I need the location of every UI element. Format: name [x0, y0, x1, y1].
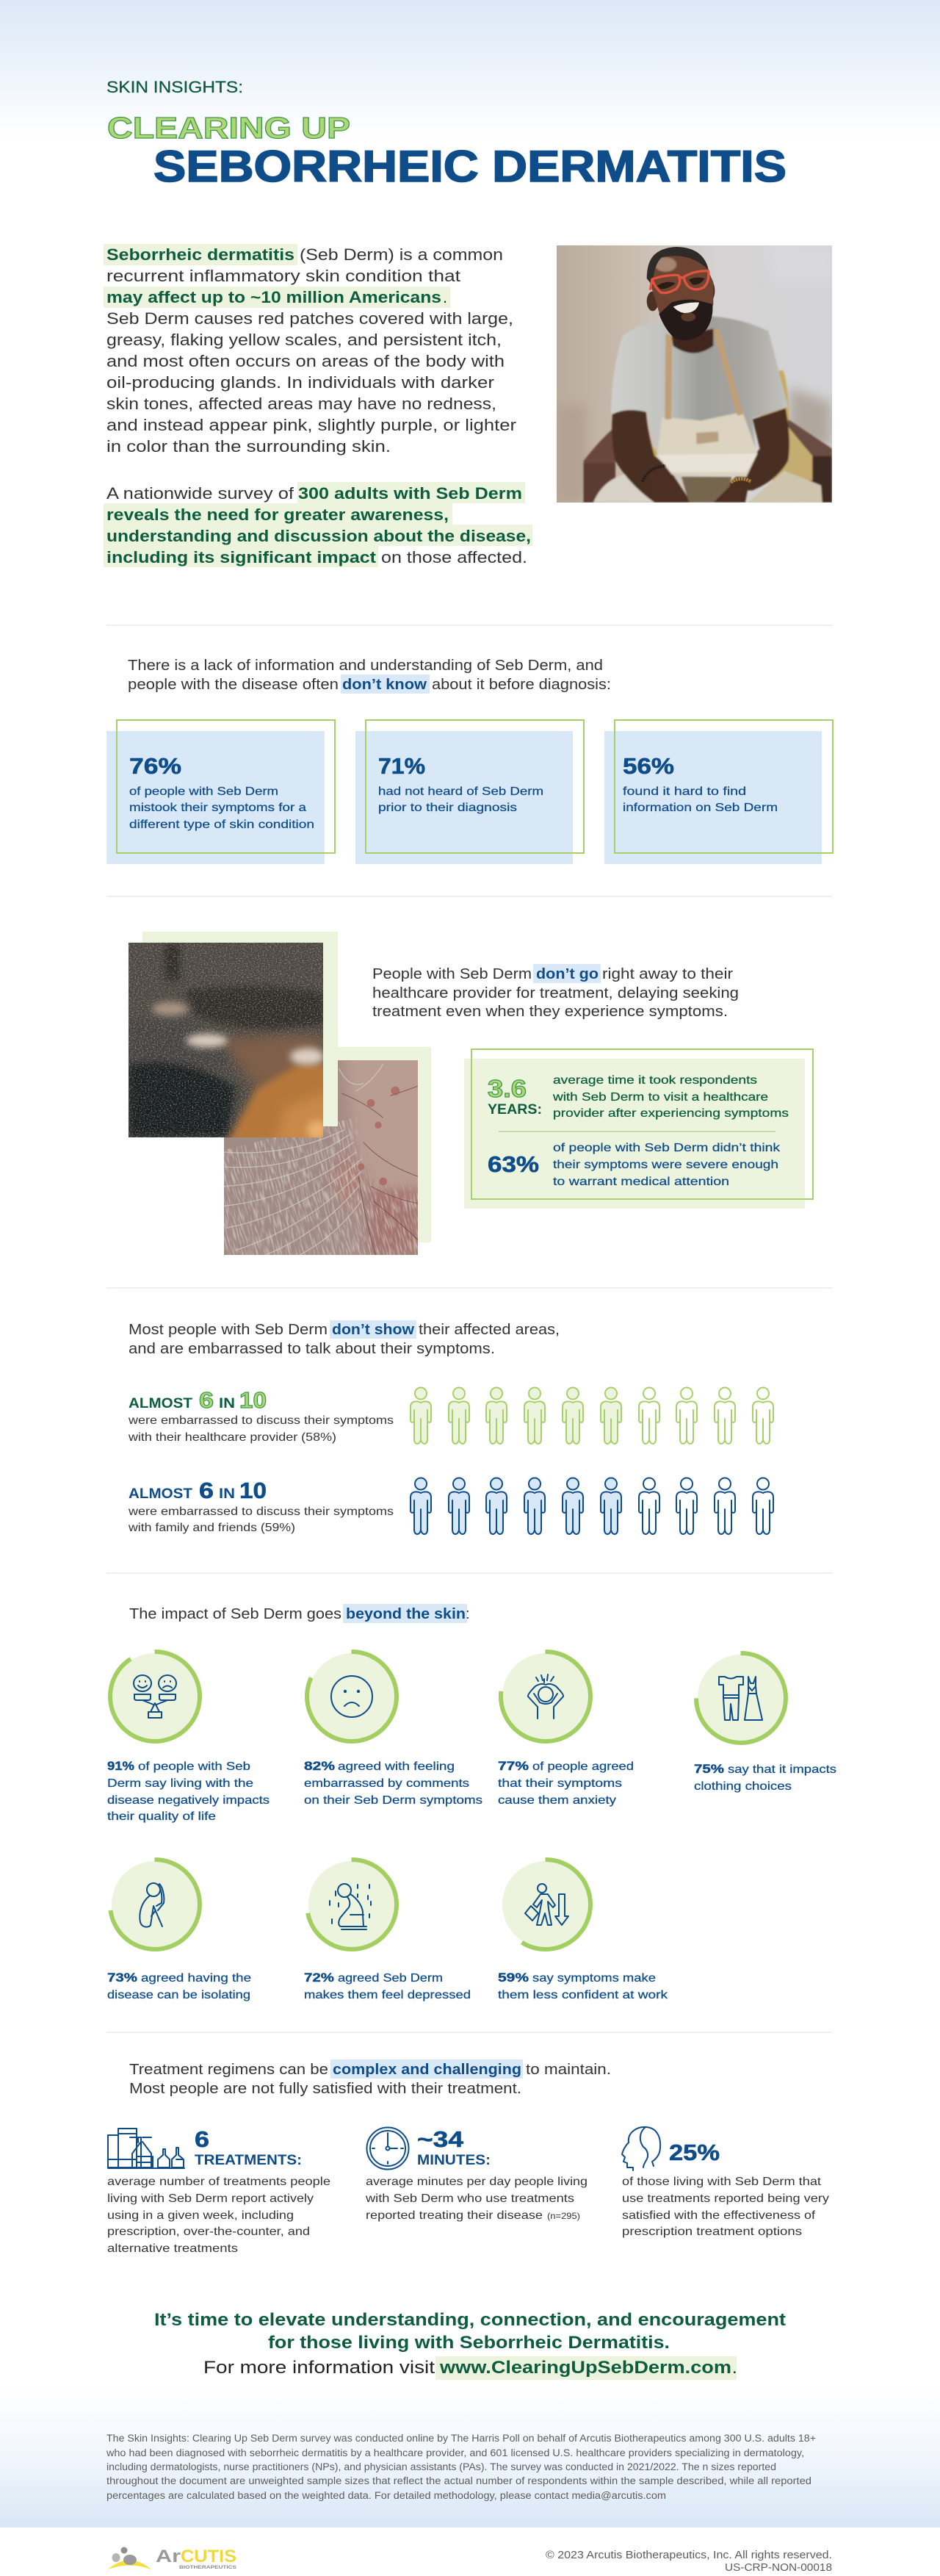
- call to action: [154, 2310, 786, 2380]
- intro text block: and most often occurs on areas of the body with: [106, 352, 505, 370]
- section: don't go: [129, 932, 814, 1255]
- photo backing panel: upper: [142, 932, 338, 1126]
- intro text: don't know: about it before diagnosis:: [432, 677, 611, 693]
- donut: 91% with scale of emotions icon: [110, 1652, 200, 1741]
- intro text: beyond the skin: beyond the skin: [346, 1606, 466, 1622]
- stat: 73% isolating: agreed having the: [141, 1972, 251, 1985]
- card: 76%: mistook their symptoms for a: [129, 802, 306, 814]
- stat: almost 6 in 10 healthcare provider: with their healthcare provider (58%): [128, 1431, 336, 1444]
- stat: 91% quality of life: disease negatively impacts: [107, 1794, 270, 1807]
- donut: 73% with curled up person icon: [110, 1860, 200, 1949]
- stat: almost 6 in 10 family and friends: with family and friends (59%): [128, 1522, 295, 1534]
- intro text block: (Seb Derm) is a common: [300, 245, 503, 264]
- photo: gray hair scalp with red flaky patches: [224, 1060, 418, 1255]
- stat: 25%: of those living with Seb Derm that: [622, 2176, 822, 2188]
- call to action: .: [732, 2358, 737, 2378]
- card: 76%: [106, 720, 335, 864]
- stat: 91% quality of life: [107, 1652, 270, 1823]
- copyright: © 2023 Arcutis Biotherapeutics, Inc. All rights reserved.: [546, 2549, 832, 2561]
- stat: 63%: their symptoms were severe enough: [553, 1159, 778, 1171]
- call to action: www.ClearingUpSebDerm.com: [439, 2358, 731, 2378]
- stat: 59% confidence at work: 59%: [498, 1971, 529, 1985]
- intro text block: and instead appear pink, slightly purple, or lighter: [106, 416, 516, 434]
- intro text block: A nationwide survey of: [106, 484, 294, 503]
- intro text: don't go: healthcare provider for treatment, delaying seeking: [372, 985, 739, 1001]
- stat: 59% confidence at work: [498, 1860, 668, 2001]
- stat: almost 6 in 10 family and friends: were embarrassed to discuss their symptoms: [128, 1505, 394, 1518]
- stat: 72% depressed: 72%: [304, 1971, 334, 1985]
- divider: [106, 2032, 832, 2033]
- call to action: It’s time to elevate understanding, connection, and encouragement: [154, 2310, 786, 2330]
- icon: head profile with hair: [622, 2127, 660, 2170]
- card: 71%: [355, 720, 584, 864]
- stat: ~34 minutes: average minutes per day people living: [366, 2176, 588, 2188]
- intro text: complex and challenging: [129, 2059, 611, 2097]
- divider: [106, 896, 832, 897]
- donut: 59% with walking person and down arrow icon: [501, 1860, 590, 1949]
- divider: [106, 1572, 832, 1574]
- stat: 6 treatments: prescription, over-the-counter, and: [107, 2226, 310, 2238]
- intro text: complex and challenging: to maintain.: [526, 2062, 611, 2078]
- section: don't show: [128, 1320, 773, 1534]
- stat: almost 6 in 10 healthcare provider: ALMOST: [129, 1396, 192, 1411]
- intro text block: 300 adults with Seb Derm: [298, 484, 522, 503]
- stat: 63%: [488, 1142, 781, 1188]
- intro text block: .: [443, 288, 447, 306]
- eyebrow: skin insights: SKIN INSIGHTS:: [106, 78, 243, 96]
- stat: 77% anxiety: that their symptoms: [498, 1777, 622, 1790]
- stat: 72% depressed: [304, 1860, 471, 2001]
- footnote: The Skin Insights: Clearing Up Seb Derm survey was conducted online by The Harris Poll on behalf of Arcutis Biotherapeutics among 300 U.S. adults 18+: [106, 2433, 816, 2444]
- stat: 91% quality of life: 91%: [107, 1759, 134, 1773]
- section: don't know: [106, 658, 833, 864]
- copyright: [546, 2549, 832, 2574]
- stat: 63%: of people with Seb Derm didn’t think: [553, 1142, 781, 1154]
- intro text block: skin tones, affected areas may have no redness,: [106, 395, 496, 413]
- photo backing panel: lower: [238, 1047, 431, 1242]
- stat: 25%: [622, 2127, 829, 2238]
- card: 56%: [604, 720, 833, 864]
- stat: 6 treatments: [107, 2126, 330, 2255]
- stat: 73% isolating: [107, 1860, 251, 2001]
- stat: 63%: 63%: [488, 1151, 539, 1177]
- intro text block: on those affected.: [381, 548, 527, 566]
- intro text: don't know: don’t know: [342, 677, 427, 693]
- title line: clearing up: CLEARING UP: [107, 111, 350, 145]
- donut: 77% with hands on head icon: [501, 1652, 590, 1741]
- stat: 6 treatments: average number of treatments people: [107, 2176, 330, 2188]
- intro text: complex and challenging: Most people are not fully satisfied with their treatment.: [129, 2081, 521, 2097]
- stat: ~34 minutes: (n=295): [547, 2211, 580, 2221]
- stat: ~34 minutes: [365, 2126, 588, 2222]
- footnote: percentages are calculated based on the weighted data. For detailed methodology, please contact media@arcutis.com: [106, 2490, 666, 2501]
- divider: [106, 625, 832, 626]
- stat: 75% clothing: clothing choices: [694, 1780, 792, 1793]
- card: 71%: 71%: [378, 753, 425, 779]
- section: complex and challenging: [107, 2059, 829, 2255]
- stat: 6 treatments: TREATMENTS:: [195, 2153, 302, 2168]
- intro text: don't show: their affected areas,: [419, 1322, 560, 1338]
- stat: 77% anxiety: of people agreed: [532, 1760, 634, 1773]
- intro text: don't show: Most people with Seb Derm: [129, 1322, 328, 1338]
- call to action: For more information visit: [203, 2358, 435, 2378]
- stat: 91% quality of life: their quality of life: [107, 1810, 216, 1823]
- logo: Arcutis Biotherapeutics: BIOTHERAPEUTICS: [179, 2566, 236, 2570]
- stat: 3.6 years: [488, 1074, 789, 1120]
- intro text: don't go: don’t go: [536, 966, 599, 982]
- intro text: don't go: right away to their: [602, 966, 733, 982]
- card: 76%: of people with Seb Derm: [129, 785, 278, 798]
- stat: 73% isolating: 73%: [107, 1971, 137, 1985]
- intro text: don't show: [129, 1320, 560, 1357]
- stat: almost 6 in 10 healthcare provider: [128, 1387, 394, 1444]
- pictogram: 6 of 10 people green: [411, 1387, 773, 1444]
- intro text: don't know: [128, 658, 611, 694]
- divider: [106, 1287, 832, 1289]
- stat: 3.6 years: 3.6: [488, 1075, 527, 1102]
- intro text: don't go: [372, 964, 739, 1020]
- intro text: don't know: There is a lack of information and understanding of Seb Derm, and: [128, 658, 603, 674]
- stat: almost 6 in 10 family and friends: ALMOST: [129, 1486, 192, 1502]
- intro text block: greasy, flaking yellow scales, and persistent itch,: [106, 331, 502, 349]
- logo: Arcutis Biotherapeutics: CUTIS: [181, 2547, 236, 2566]
- intro text block: Seb Derm causes red patches covered with large,: [106, 309, 513, 328]
- callout panel: delay statistics: [464, 1049, 813, 1209]
- intro text: complex and challenging: complex and challenging: [333, 2062, 521, 2078]
- stat: 3.6 years: YEARS:: [488, 1102, 542, 1118]
- stat: 59% confidence at work: say symptoms make: [532, 1972, 656, 1985]
- stat: 25%: satisfied with the effectiveness of: [622, 2209, 816, 2222]
- stat: 6 treatments: 6: [195, 2126, 209, 2152]
- copyright: US-CRP-NON-00018: [725, 2561, 832, 2574]
- icon: clock: [367, 2128, 408, 2169]
- stat: almost 6 in 10 family and friends: 10: [239, 1478, 267, 1503]
- stat: almost 6 in 10 healthcare provider: IN: [219, 1396, 235, 1411]
- stat: 82% embarrassed: [304, 1652, 482, 1807]
- stat: 25%: 25%: [669, 2140, 720, 2165]
- card: 56%: information on Seb Derm: [623, 802, 778, 814]
- stat: 6 treatments: alternative treatments: [107, 2242, 238, 2255]
- intro text: don't go: People with Seb Derm: [372, 966, 532, 982]
- stat: almost 6 in 10 healthcare provider: 6: [199, 1387, 214, 1413]
- stat: 77% anxiety: 77%: [498, 1759, 529, 1773]
- card: 76%: different type of skin condition: [129, 819, 314, 831]
- stat: 77% anxiety: [498, 1652, 634, 1807]
- stat: 82% embarrassed: 82%: [304, 1759, 335, 1773]
- stat: almost 6 in 10 family and friends: IN: [219, 1486, 235, 1502]
- stat: 75% clothing: say that it impacts: [728, 1763, 836, 1776]
- intro text: don't show: don’t show: [332, 1322, 414, 1338]
- stat: 91% quality of life: Derm say living with the: [107, 1777, 253, 1790]
- call to action: for those living with Seborrheic Dermatitis.: [268, 2333, 670, 2353]
- intro text block: recurrent inflammatory skin condition that: [106, 267, 460, 285]
- stat: almost 6 in 10 healthcare provider: 10: [239, 1387, 267, 1413]
- stat: 3.6 years: provider after experiencing symptoms: [553, 1107, 789, 1120]
- footnote: including dermatologists, nurse practitioners (NPs), and physician assistants (PAs). The survey was conducted in 2021/2022. The n sizes reported: [106, 2461, 776, 2472]
- intro text: beyond the skin: The impact of Seb Derm goes: [129, 1606, 341, 1622]
- logo: Arcutis Biotherapeutics: [108, 2547, 236, 2570]
- intro text: don't show: and are embarrassed to talk about their symptoms.: [129, 1341, 495, 1357]
- stat: 72% depressed: agreed Seb Derm: [338, 1972, 443, 1985]
- intro text block: understanding and discussion about the disease,: [106, 527, 531, 545]
- intro text block: Seborrheic dermatitis: [106, 245, 294, 264]
- intro text block: may affect up to ~10 million Americans: [106, 288, 441, 306]
- intro text: beyond the skin: :: [466, 1606, 470, 1622]
- card: 76%: 76%: [129, 753, 181, 779]
- card: 71%: had not heard of Seb Derm: [378, 785, 543, 798]
- card: 56%: 56%: [623, 753, 674, 779]
- title line: seborrheic dermatitis: SEBORRHEIC DERMATITIS: [153, 142, 787, 191]
- stat: 63%: to warrant medical attention: [553, 1176, 729, 1188]
- stat: 6 treatments: using in a given week, including: [107, 2209, 294, 2222]
- stat: 91% quality of life: of people with Seb: [138, 1760, 250, 1773]
- photo: smiling man in apron with red glasses: [557, 245, 832, 503]
- stat: 73% isolating: disease can be isolating: [107, 1989, 250, 2001]
- stat: ~34 minutes: MINUTES:: [417, 2153, 491, 2168]
- photo: dark hair scalp with flaky patches: [129, 943, 332, 1145]
- stat: 25%: use treatments reported being very: [622, 2192, 829, 2205]
- stat: almost 6 in 10 family and friends: 6: [199, 1478, 214, 1503]
- donut: 82% with sad face icon: [307, 1652, 397, 1741]
- intro text: beyond the skin: [129, 1604, 470, 1623]
- intro text: don't know: people with the disease often: [128, 677, 339, 693]
- stat: 59% confidence at work: them less confident at work: [498, 1989, 668, 2001]
- card: 56%: found it hard to find: [623, 785, 746, 798]
- stat: ~34 minutes: with Seb Derm who use treatments: [365, 2192, 574, 2205]
- stat: 75% clothing: [694, 1653, 836, 1793]
- stat: 82% embarrassed: agreed with feeling: [338, 1760, 455, 1773]
- stat: ~34 minutes: reported treating their disease: [366, 2209, 543, 2222]
- section: beyond the skin: [107, 1604, 836, 2001]
- donut: 72% with kneeling person in rain icon: [307, 1860, 397, 1949]
- intro text block: oil-producing glands. In individuals with darker: [106, 373, 494, 392]
- stat: 6 treatments: living with Seb Derm report actively: [107, 2192, 314, 2205]
- stat: 82% embarrassed: on their Seb Derm symptoms: [304, 1794, 482, 1807]
- logo: Arcutis Biotherapeutics: Ar: [156, 2547, 181, 2566]
- stat: 25%: prescription treatment options: [622, 2226, 802, 2238]
- footnote: throughout the document are unweighted sample sizes that reflect the actual number of respondents within the sample described, while all reported: [106, 2475, 811, 2486]
- stat: 3.6 years: average time it took respondents: [553, 1074, 757, 1087]
- stat: almost 6 in 10 family and friends: [128, 1478, 394, 1534]
- pictogram: 6 of 10 people blue: [411, 1478, 773, 1534]
- card: 71%: prior to their diagnosis: [378, 802, 517, 814]
- intro text: complex and challenging: Treatment regimens can be: [129, 2062, 328, 2078]
- stat: 72% depressed: makes them feel depressed: [304, 1989, 471, 2001]
- stat: ~34 minutes: ~34: [417, 2126, 464, 2152]
- intro text block: in color than the surrounding skin.: [106, 437, 391, 456]
- footnote: [106, 2433, 816, 2501]
- stat: 77% anxiety: cause them anxiety: [498, 1794, 616, 1807]
- intro text block: [104, 244, 532, 567]
- intro text block: reveals the need for greater awareness,: [106, 506, 449, 524]
- intro text: don't go: treatment even when they experience symptoms.: [372, 1004, 728, 1020]
- intro text block: including its significant impact: [106, 548, 377, 566]
- stat: almost 6 in 10 healthcare provider: were embarrassed to discuss their symptoms: [128, 1414, 394, 1427]
- donut: 75% with clothes icon: [696, 1653, 786, 1743]
- stat: 75% clothing: 75%: [694, 1762, 724, 1776]
- icon: skincare bottles: [108, 2129, 184, 2168]
- footnote: who had been diagnosed with seborrheic dermatitis by a healthcare provider, and 601 licensed U.S. healthcare providers specializing in dermatology,: [106, 2447, 804, 2458]
- title block: [106, 78, 787, 191]
- stat: 3.6 years: with Seb Derm to visit a healthcare: [552, 1091, 768, 1104]
- stat: 82% embarrassed: embarrassed by comments: [304, 1777, 469, 1790]
